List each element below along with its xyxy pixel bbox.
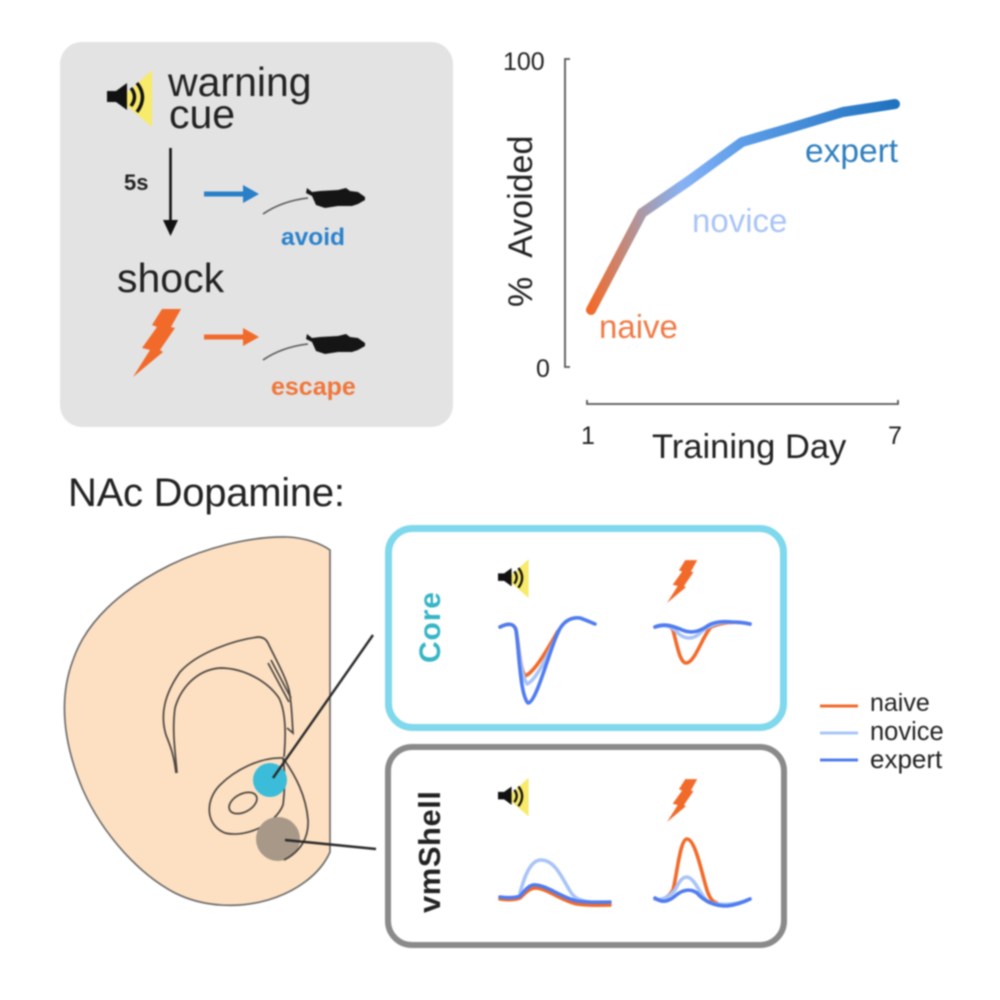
icon: lightning bolt — [667, 779, 697, 822]
vmShell border — [388, 747, 784, 945]
learning curve — [591, 104, 895, 310]
vmShell region — [256, 817, 300, 861]
panel: core — [388, 528, 784, 728]
heading: warning cue: warning — [167, 59, 312, 105]
leader line to vmShell panel — [285, 840, 376, 849]
panel: vmShell — [388, 747, 784, 945]
label: avoid: avoid — [281, 224, 345, 251]
outer nucleus contour — [283, 758, 308, 860]
x axis title: Training Day — [652, 428, 847, 466]
arrow: cue to shock — [163, 148, 178, 236]
x tick label 1: 1 — [581, 422, 595, 450]
chart: core response to shock — [655, 622, 750, 663]
heading: shock: shock — [117, 255, 225, 301]
label: escape: escape — [271, 373, 356, 401]
y axis — [565, 59, 570, 367]
y axis title: % Avoided — [502, 136, 540, 307]
chart: percent avoided by training day — [502, 48, 902, 466]
x tick label 7: 7 — [888, 422, 902, 450]
x axis — [587, 400, 898, 404]
leader line to core panel — [273, 635, 373, 778]
chart: vmShell response to shock — [655, 839, 750, 906]
brain outline — [65, 537, 330, 905]
icon: speaker — [498, 559, 529, 598]
core border — [388, 528, 784, 728]
stage label naive: naive — [599, 308, 678, 345]
icon: lightning bolt — [667, 560, 697, 603]
heading: NAc Dopamine: NAc Dopamine: — [68, 471, 345, 515]
icon: mouse escaping — [263, 334, 365, 360]
legend item naive: naive — [870, 689, 930, 717]
heading: warning cue — [167, 59, 312, 137]
stage label expert: expert — [805, 133, 899, 170]
icon: warning speaker — [107, 70, 152, 127]
vmShell label: vmShell — [412, 791, 447, 913]
chart: core response to cue — [500, 618, 595, 703]
arrow: escape — [204, 328, 259, 346]
panel: behavioral task — [60, 42, 453, 427]
icon: speaker — [498, 778, 529, 816]
y tick label 100: 100 — [503, 48, 545, 76]
stage label novice: novice — [692, 202, 787, 239]
y tick label 0: 0 — [536, 355, 550, 383]
arrow: avoid — [204, 185, 259, 203]
legend item expert: expert — [870, 744, 943, 774]
legend — [820, 689, 944, 774]
label: 5s delay: 5s — [124, 170, 148, 195]
chart: vmShell response to cue — [500, 860, 610, 905]
core region — [253, 763, 287, 797]
icon: mouse avoiding — [263, 188, 365, 214]
legend item novice: novice — [870, 718, 944, 746]
inner anatomical contours — [163, 637, 293, 834]
panel background — [60, 42, 453, 427]
heading: warning cue: cue — [169, 91, 235, 137]
brain section diagram — [65, 537, 376, 905]
icon: lightning bolt — [133, 309, 181, 377]
core label: Core — [414, 592, 447, 663]
